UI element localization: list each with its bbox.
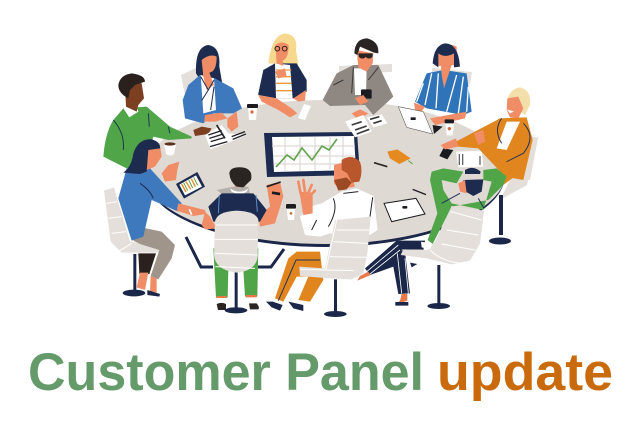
table legs (186, 237, 284, 267)
illustration: team around a meeting table (103, 33, 538, 317)
front chair of man in white shirt (299, 217, 371, 317)
title: orange word: update (437, 343, 613, 402)
coffee cup near laptop (445, 119, 454, 135)
laptop on table (398, 107, 443, 134)
phone on table (298, 104, 311, 120)
raised hand of man in white shirt (298, 180, 315, 215)
coffee cup near blazer (247, 104, 258, 120)
person: man with glasses in grey jacket (323, 38, 393, 120)
person: woman in blue top with tablet (104, 168, 206, 297)
table underside rim (145, 103, 505, 247)
person: man in green sweater (103, 73, 212, 168)
table top (144, 100, 506, 244)
documents (345, 114, 387, 137)
back chair backs (181, 64, 538, 200)
left chair (104, 187, 165, 296)
right front chair (401, 206, 484, 309)
right chair post (489, 195, 511, 244)
person: blond man in orange jacket (441, 87, 538, 180)
papers and tablet on right table (384, 189, 426, 222)
open notebook (205, 125, 247, 149)
tablet with bar chart (176, 172, 205, 199)
title: green words: Customer Panel (28, 343, 424, 402)
meeting table (144, 100, 506, 267)
person: woman in striped blue shirt (414, 43, 472, 125)
striped legs of man in white shirt (357, 241, 425, 306)
screen with line chart (264, 132, 360, 177)
coffee cup on front table (286, 204, 296, 220)
title: Customer Panel update (28, 343, 613, 402)
person: blonde woman with glasses (258, 33, 307, 117)
paper and phone by orange jacket (439, 148, 483, 167)
head of woman in blue top with hair and raised hand (123, 139, 179, 182)
orange trousers and shoes (266, 252, 323, 311)
person: woman in blue blazer (183, 45, 242, 132)
person: man in white shirt with beard (300, 157, 378, 237)
person: man in green leaning back, seen from behind (428, 168, 523, 244)
coffee cup near green sweater (164, 142, 176, 155)
person: man in navy top seen from behind (202, 167, 283, 313)
orange book and pen (374, 149, 413, 167)
